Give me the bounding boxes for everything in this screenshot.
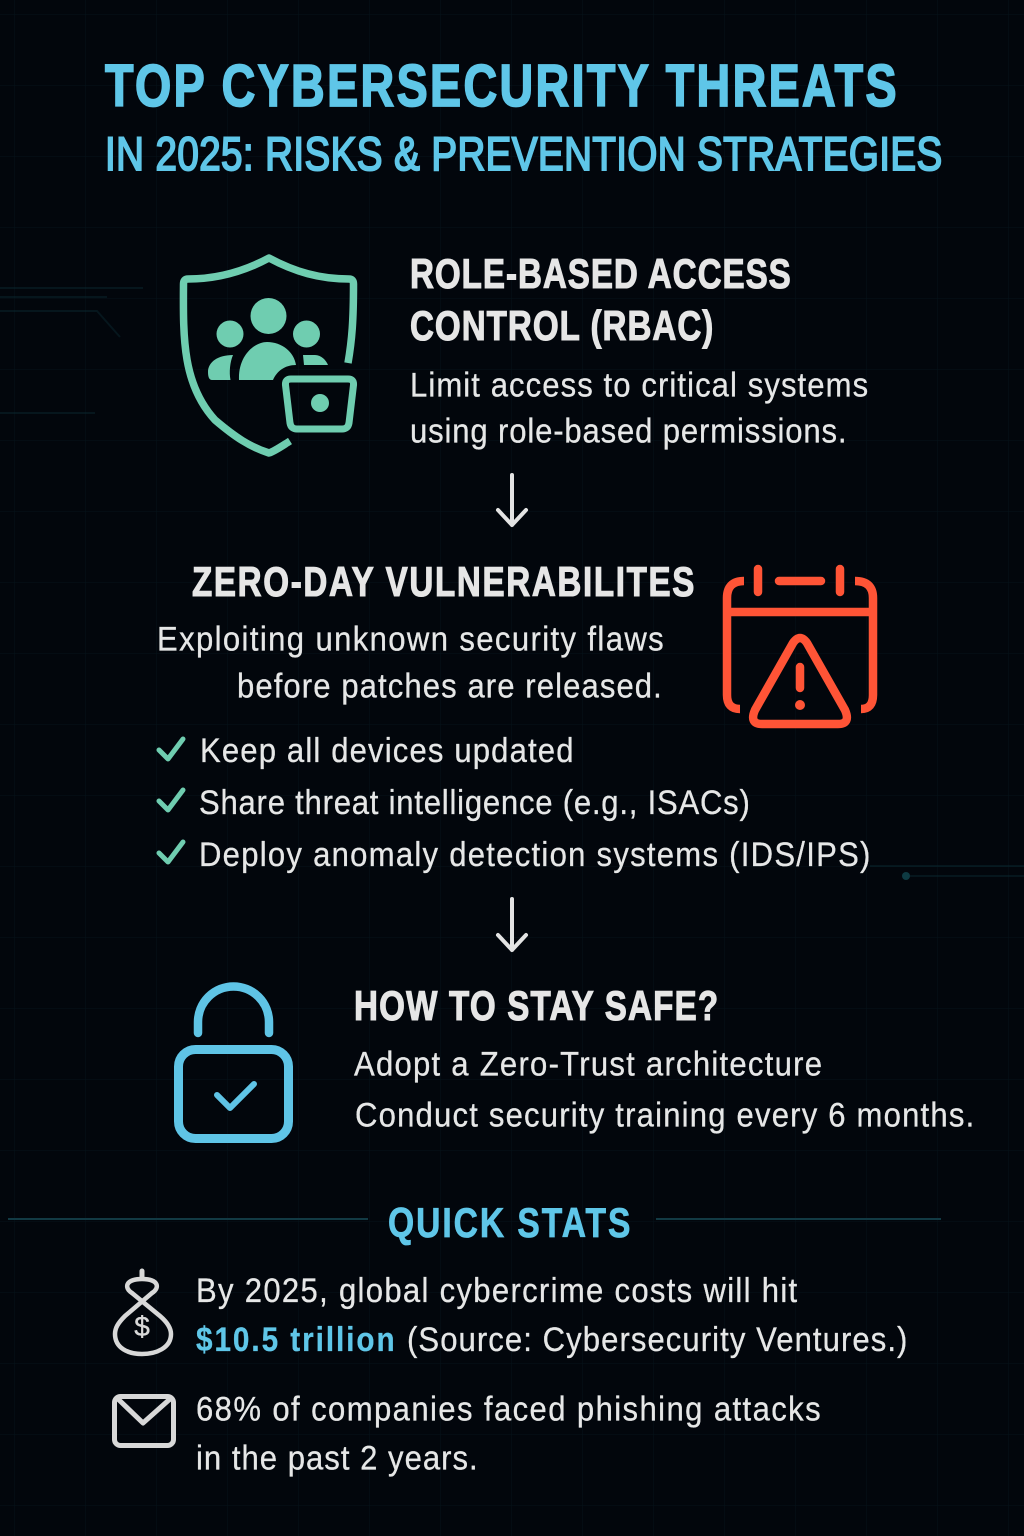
text block: stay safe advice: Conduct security training every 6 months. <box>355 1095 974 1134</box>
heading: zero-day vulnerabilities: ZERO-DAY VULNERABILITES <box>192 559 694 606</box>
heading: role-based access control <box>410 251 791 350</box>
text block: zero-day description: Exploiting unknown security flaws <box>157 619 664 658</box>
text block: zero-day description: before patches are released. <box>237 666 662 705</box>
title: TOP CYBERSECURITY THREATS <box>105 54 897 119</box>
checklist <box>159 730 870 873</box>
text block: phishing stat: in the past 2 years. <box>196 1438 478 1477</box>
icon: shield with users and laptop <box>183 258 354 453</box>
icon: padlock with check <box>178 986 288 1138</box>
panel: quick stats <box>8 1201 941 1477</box>
text block: cybercrime cost stat <box>196 1270 907 1359</box>
heading: how to stay safe: HOW TO STAY SAFE? <box>354 983 718 1030</box>
text block: zero-day description <box>157 619 664 705</box>
text block: cybercrime cost stat: (Source: Cybersecurity Ventures.) <box>407 1319 907 1358</box>
icon: money bag <box>115 1271 171 1354</box>
text block: cybercrime cost stat: By 2025, global cybercrime costs will hit <box>196 1270 797 1309</box>
arrow: down to zero-day <box>498 475 526 525</box>
text block: role-based access description: using role-based permissions. <box>410 411 847 450</box>
heading: role-based access control: ROLE-BASED ACCESS <box>410 251 791 298</box>
text block: phishing stat: 68% of companies faced phishing attacks <box>196 1389 821 1428</box>
text block: stay safe advice: Adopt a Zero-Trust architecture <box>354 1044 822 1083</box>
text block: cybercrime cost stat: $10.5 trillion <box>196 1320 395 1359</box>
title <box>105 54 942 181</box>
heading: quick stats: QUICK STATS <box>388 1201 630 1247</box>
panel: how to stay safe <box>178 983 974 1138</box>
icon: envelope <box>114 1396 174 1446</box>
text block: stay safe advice <box>354 1044 974 1134</box>
text block: role-based access description <box>410 365 868 450</box>
icon: calendar with warning triangle <box>727 569 873 724</box>
check item: deploy anomaly detection: Deploy anomaly detection systems (IDS/IPS) <box>199 834 870 873</box>
check item: keep devices updated: Keep all devices updated <box>200 730 574 769</box>
text block: phishing stat <box>196 1389 821 1477</box>
panel: zero-day vulnerabilities <box>157 559 873 873</box>
icon: money bag: $ <box>134 1311 150 1342</box>
title: IN 2025: RISKS & PREVENTION STRATEGIES <box>105 128 942 181</box>
heading: role-based access control: CONTROL (RBAC) <box>410 303 713 350</box>
panel: role-based access control <box>183 251 868 453</box>
text block: role-based access description: Limit access to critical systems <box>410 365 868 404</box>
arrow: down to stay safe <box>498 899 526 950</box>
check item: share threat intelligence: Share threat intelligence (e.g., ISACs) <box>199 782 750 821</box>
